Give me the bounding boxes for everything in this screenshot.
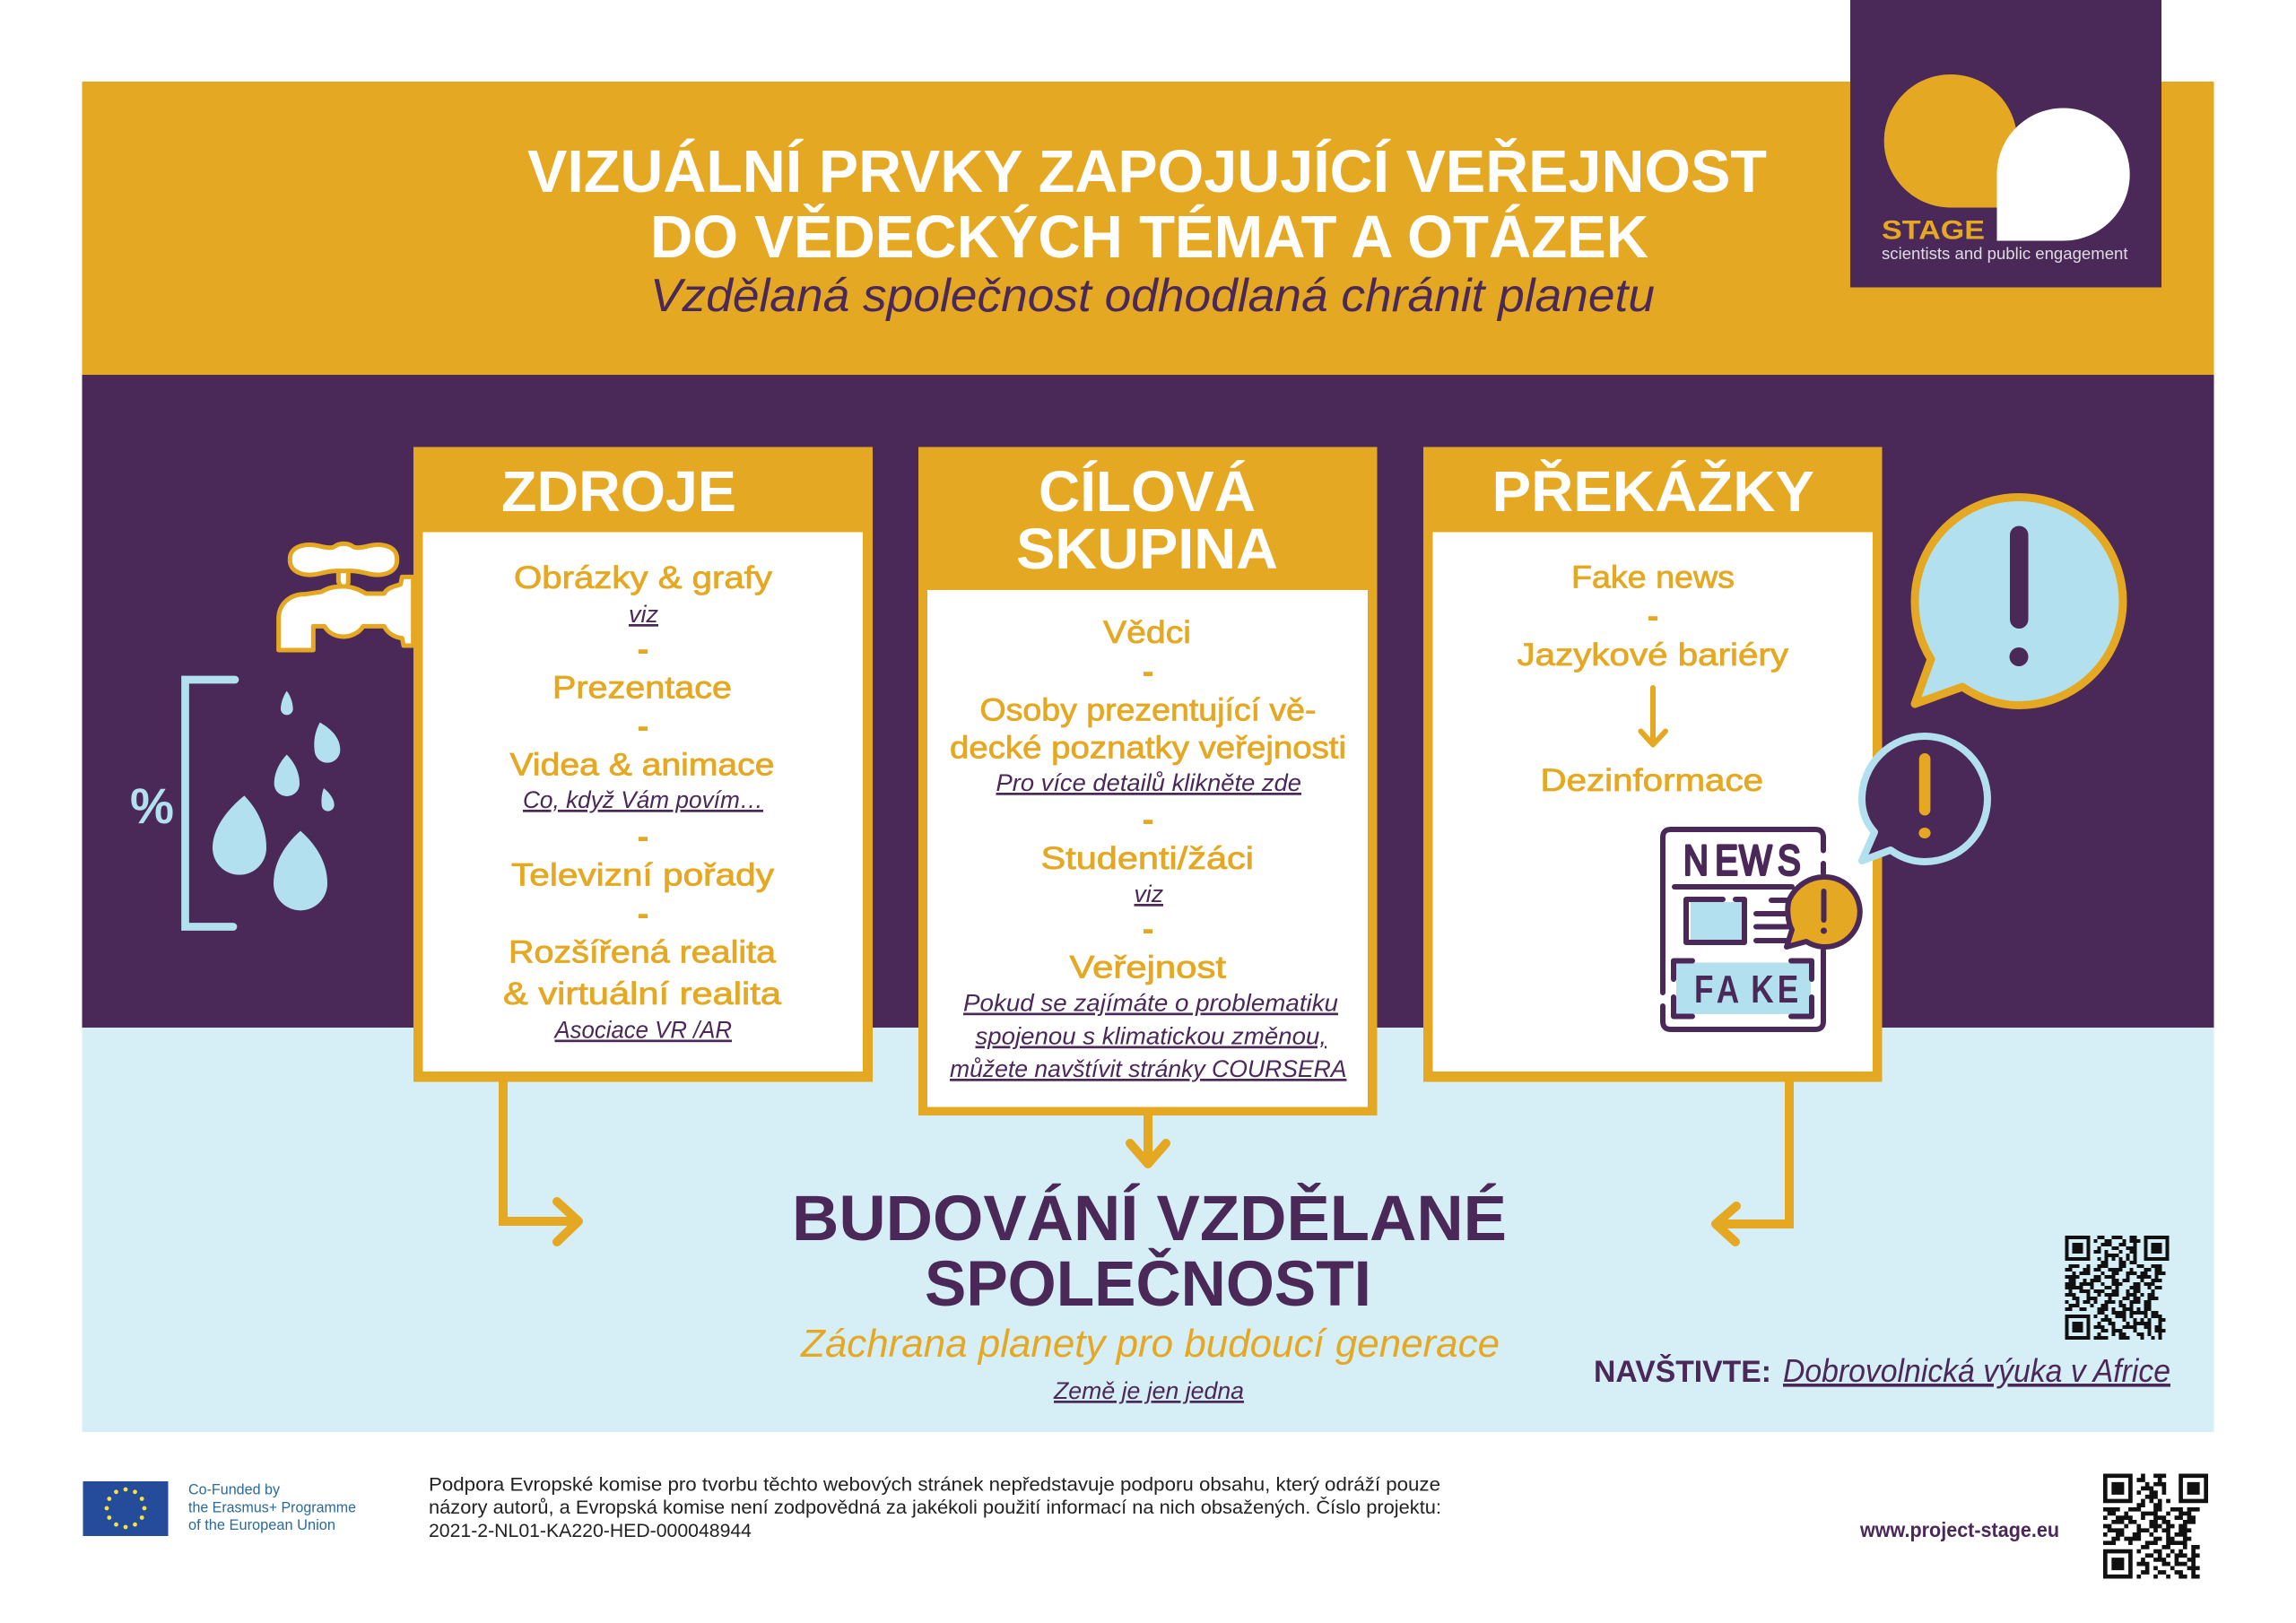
logo: EU flag	[83, 1481, 169, 1536]
list: cilova skupina: Vědci	[1103, 615, 1191, 650]
heading: cilova skupina: CÍLOVÁ	[1039, 459, 1256, 524]
co-funded text: Co-Funded by	[188, 1481, 280, 1497]
logo: STAGE	[1850, 0, 2161, 287]
message subtitle: Záchrana planety pro budoucí generace	[800, 1322, 1500, 1366]
website address: www.project-stage.eu	[1859, 1518, 2059, 1541]
purple middle band	[83, 375, 2213, 1028]
list: prekazky: -	[1647, 596, 1659, 636]
list: cilova skupina: spojenou s klimatickou změnou,	[976, 1022, 1326, 1049]
list: zdroje: Asociace VR /AR	[553, 1017, 732, 1044]
list: zdroje: Obrázky & grafy	[514, 560, 773, 595]
list: cilova skupina: viz	[1134, 881, 1163, 907]
disclaimer text: Podpora Evropské komise pro tvorbu těchto webových stránek nepředstavuje podporu obsahu, který odráží pouze	[429, 1474, 1440, 1496]
FAKE label	[1676, 963, 1811, 1014]
co-funded text: of the European Union	[188, 1516, 335, 1533]
list: zdroje: -	[637, 629, 649, 669]
heading: cilova skupina: SKUPINA	[1016, 516, 1278, 581]
list: cilova skupina: Studenti/žáci	[1040, 841, 1254, 876]
list: prekazky: Jazykové bariéry	[1518, 638, 1789, 673]
icon: small speech bubble with exclamation mark	[1862, 736, 1987, 862]
list: zdroje: -	[637, 817, 649, 856]
logo: STAGE: scientists and public engagement	[1882, 244, 2127, 263]
list: cilova skupina: Veřejnost	[1069, 950, 1226, 985]
main message: BUDOVÁNÍ VZDĚLANÉ	[792, 1183, 1507, 1254]
list: zdroje	[503, 560, 782, 1044]
list: zdroje: & virtuální realita	[503, 976, 782, 1011]
disclaimer text: názory autorů, a Evropská komise není zodpovědná za jakékoli použití informací na nich obsažených. Číslo projektu:	[429, 1497, 1441, 1518]
logo: STAGE: STAGE	[1882, 215, 1985, 246]
drops	[213, 691, 340, 910]
disclaimer text: 2021-2-NL01-KA220-HED-000048944	[429, 1521, 752, 1541]
list: zdroje: -	[637, 707, 649, 746]
list: cilova skupina: Pro více detailů klikněte zde	[996, 769, 1301, 796]
icon: water tap	[279, 543, 413, 650]
title: VIZUÁLNÍ PRVKY ZAPOJUJÍCÍ VEŘEJNOST	[527, 138, 1767, 205]
icon: water drops with percent bracket	[130, 680, 340, 927]
subtitle: Vzdělaná společnost odhodlaná chránit planetu	[650, 270, 1655, 322]
alert badge	[1787, 877, 1860, 947]
panel: prekazky	[1423, 447, 1882, 1081]
picture placeholder	[1691, 902, 1744, 942]
list: cilova skupina: decké poznatky veřejnosti	[950, 730, 1346, 766]
co-funded text	[188, 1481, 356, 1533]
list: zdroje: Co, když Vám povím…	[523, 786, 763, 813]
heading: cilova skupina	[1016, 459, 1278, 581]
call to action	[1594, 1352, 2170, 1389]
main message	[792, 1183, 1507, 1320]
light blue lower band	[83, 1028, 2213, 1432]
arrow: down	[1641, 688, 1665, 744]
arrow: from Zdroje to main message	[503, 1081, 578, 1242]
list: zdroje: -	[637, 894, 649, 933]
percent sign: %	[130, 777, 174, 834]
list: cilova skupina: -	[1142, 909, 1154, 949]
icon: fake news newspaper: FAKE	[1694, 968, 1798, 1011]
list: cilova skupina: můžete navštívit stránky COURSERA	[950, 1055, 1347, 1082]
list: cilova skupina: -	[1142, 800, 1154, 839]
list: zdroje: Rozšířená realita	[509, 934, 777, 970]
list: prekazky: Fake news	[1571, 560, 1735, 595]
header band	[83, 82, 2213, 375]
list: cilova skupina: -	[1142, 652, 1154, 691]
list: zdroje: Prezentace	[552, 671, 732, 705]
co-funded text: the Erasmus+ Programme	[188, 1499, 356, 1515]
list: prekazky: Dezinformace	[1541, 763, 1763, 798]
call to action: NAVŠTIVTE:	[1594, 1354, 1771, 1389]
bracket	[185, 680, 235, 927]
list: zdroje: Videa & animace	[509, 748, 775, 782]
list: cilova skupina: Osoby prezentující vě-	[979, 692, 1317, 728]
list: zdroje: viz	[629, 601, 658, 628]
list: cilova skupina: Pokud se zajímáte o problematiku	[963, 990, 1338, 1017]
arrow: from Překážky to main message	[1716, 1081, 1789, 1242]
icon: fake news newspaper	[1663, 829, 1860, 1029]
panel: zdroje	[413, 447, 873, 1081]
qr code: project website	[2103, 1474, 2208, 1578]
arrow: from Cílová skupina to main message	[1130, 1115, 1166, 1164]
message link: Země je jen jedna	[1053, 1377, 1244, 1404]
heading: prekazky: PŘEKÁŽKY	[1492, 458, 1814, 524]
heading: zdroje: ZDROJE	[501, 459, 736, 524]
list: prekazky	[1518, 560, 1789, 798]
title	[527, 138, 1767, 271]
list: cilova skupina	[950, 615, 1347, 1082]
icon: large speech bubble with exclamation mark	[1915, 498, 2123, 705]
disclaimer text	[429, 1474, 1441, 1541]
main message: SPOLEČNOSTI	[925, 1248, 1371, 1320]
newspaper outline	[1663, 829, 1823, 1029]
NEWS label: NEWS	[1683, 838, 1801, 884]
call to action: Dobrovolnická výuka v Africe	[1783, 1352, 2170, 1389]
list: zdroje: Televizní pořady	[511, 857, 775, 893]
title: DO VĚDECKÝCH TÉMAT A OTÁZEK	[650, 204, 1648, 271]
panel: cilova skupina	[918, 447, 1378, 1115]
qr code: volunteer teaching	[2065, 1236, 2169, 1340]
